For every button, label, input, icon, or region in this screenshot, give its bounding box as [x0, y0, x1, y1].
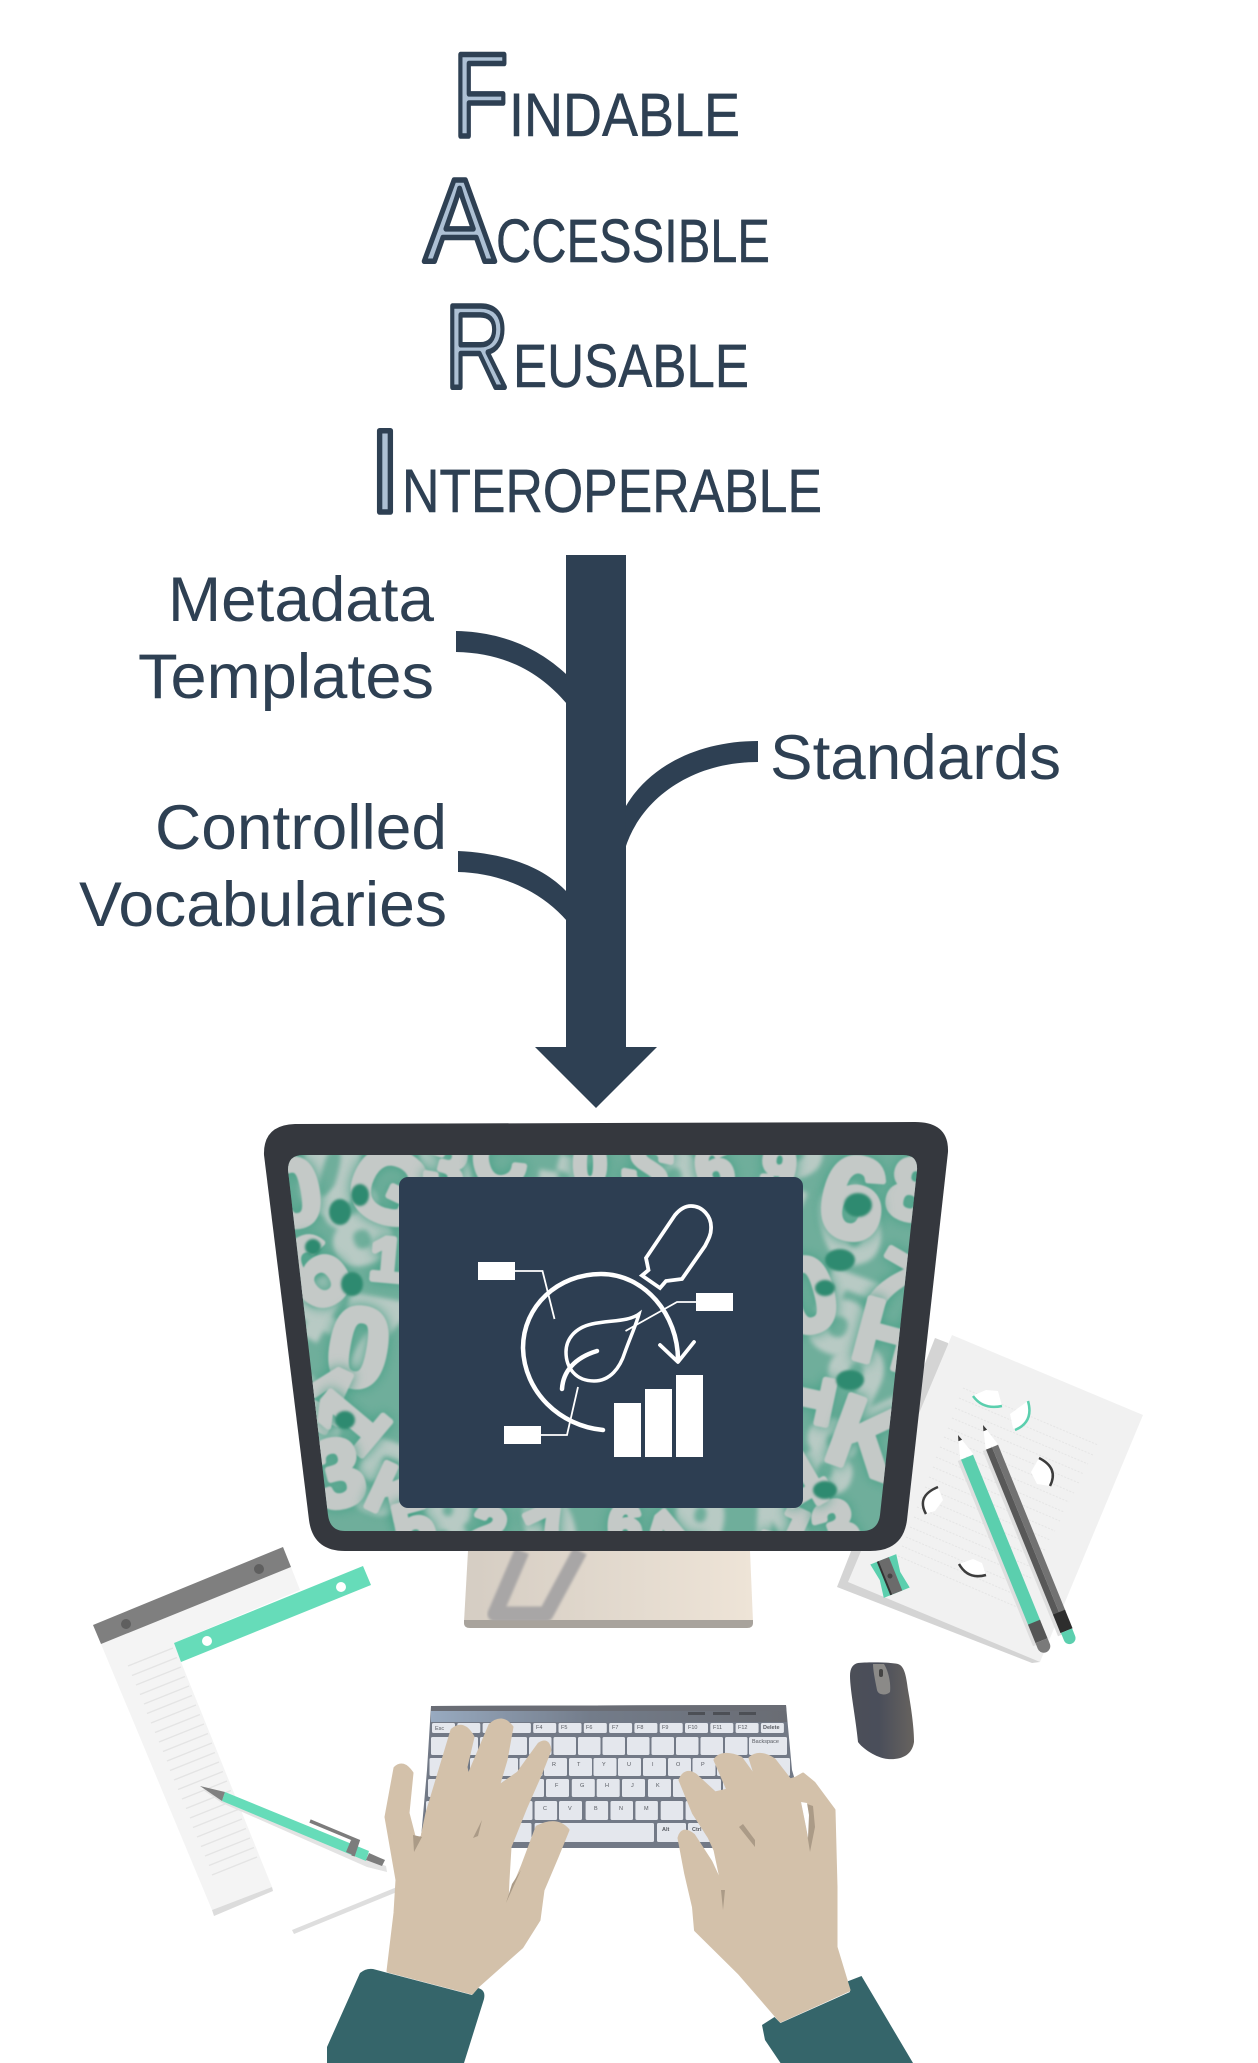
key labels: F8 [637, 1725, 643, 1731]
screen wallpaper of scattered characters: 6 [608, 1493, 642, 1560]
screen wallpaper of scattered characters: 8 [877, 1138, 948, 1242]
heading: Findable: INDABLE [509, 81, 740, 149]
label: Metadata Templates: Metadata [168, 565, 435, 635]
screen wallpaper of scattered characters: 0 [763, 1232, 850, 1360]
key labels: O [676, 1762, 681, 1768]
key labels: B [594, 1806, 598, 1812]
screen wallpaper of scattered characters: 8 [787, 1396, 870, 1518]
key labels: V [568, 1806, 572, 1812]
screen wallpaper of scattered characters: 0 [318, 1282, 399, 1414]
screen wallpaper of scattered characters: S [613, 1123, 683, 1212]
ruler [174, 1566, 371, 1662]
key labels: F12 [738, 1725, 747, 1731]
screen wallpaper of scattered characters: 1 [367, 1225, 406, 1294]
monitor [264, 1122, 948, 1551]
heading: Reusable [445, 281, 749, 413]
key labels: H [605, 1783, 609, 1789]
screen wallpaper of scattered characters: 0 [573, 1131, 607, 1198]
key labels: K [656, 1783, 660, 1789]
label: Metadata Templates: Templates [138, 642, 434, 712]
screen wallpaper of scattered characters: 8 [412, 1472, 479, 1579]
pen on desk [200, 1786, 387, 1872]
screen wallpaper of scattered characters: 1 [293, 1365, 408, 1474]
label: Metadata Templates [138, 565, 435, 712]
green pencil [949, 1432, 1053, 1656]
key labels: I [652, 1762, 654, 1768]
screen wallpaper of scattered characters: 3 [297, 1416, 376, 1532]
icon: bar chart [614, 1375, 703, 1457]
left sleeve [327, 1969, 484, 2063]
dark pencil [974, 1423, 1078, 1647]
screen wallpaper of scattered characters: 4 [279, 1342, 366, 1454]
label: Controlled Vocabularies: Controlled [155, 793, 447, 863]
icon: circular arrow [523, 1274, 678, 1430]
key labels: F6 [586, 1725, 592, 1731]
icon: data lifecycle with leaf, dropper and bars [478, 1206, 733, 1457]
heading: Accessible [424, 155, 770, 287]
screen wallpaper of scattered characters: 0 [259, 1137, 330, 1250]
screen wallpaper of scattered characters: 5 [385, 1484, 443, 1570]
screen wallpaper of scattered characters: 1 [741, 1361, 856, 1435]
screen wallpaper of scattered characters: 3 [250, 1347, 358, 1485]
key labels: Esc [435, 1726, 444, 1732]
screen wallpaper of scattered characters: 2 [810, 1317, 918, 1455]
screen wallpaper of scattered characters: 6 [261, 1210, 370, 1334]
icon: leaf [562, 1314, 639, 1389]
key labels: F5 [561, 1725, 567, 1731]
screen wallpaper of scattered characters: 5 [793, 1247, 893, 1383]
screen wallpaper of scattered characters: 6 [687, 1128, 741, 1208]
heading: Reusable: R [445, 281, 509, 413]
screen wallpaper of scattered characters: J [751, 1487, 819, 1574]
icon: dropper [642, 1206, 711, 1288]
screen wallpaper of scattered characters: 6 [809, 1130, 898, 1268]
screen wallpaper of scattered characters: 0 [805, 1156, 896, 1291]
key labels: Y [602, 1762, 606, 1768]
key labels: T [577, 1762, 581, 1768]
key labels: J [631, 1783, 634, 1789]
keys [426, 1723, 795, 1842]
screen wallpaper of scattered characters: 1 [635, 1491, 715, 1576]
key labels: Alt [662, 1827, 670, 1833]
key labels: Ctrl [692, 1827, 702, 1833]
key labels: F [555, 1783, 559, 1789]
screen wallpaper of scattered characters: 5 [336, 1416, 427, 1540]
label: Standards: Standards [770, 723, 1061, 793]
screen wallpaper of scattered characters: 8 [307, 1157, 407, 1293]
key labels: F10 [688, 1725, 697, 1731]
screen wallpaper of scattered characters: 7 [331, 1272, 412, 1404]
screen wallpaper of scattered characters: 7 [852, 1232, 935, 1331]
label: Controlled Vocabularies: Vocabularies [79, 870, 447, 940]
screen wallpaper of scattered characters: 5 [635, 1111, 709, 1221]
left hand [386, 1720, 568, 1993]
screen wallpaper of scattered characters: 2 [460, 1492, 514, 1566]
heading: Reusable: EUSABLE [513, 332, 749, 400]
desk line [292, 1887, 397, 1934]
computer mouse [850, 1662, 914, 1759]
key labels [435, 1725, 780, 1833]
screen wallpaper of scattered characters: H [843, 1279, 932, 1393]
screen wallpaper of scattered characters: 7 [516, 1487, 584, 1574]
shavings [923, 1390, 1053, 1576]
screen wallpaper of scattered characters: 9 [661, 1471, 735, 1581]
screen wallpaper of scattered characters: 3 [531, 1111, 605, 1221]
title: FAIR acronym [369, 30, 822, 538]
key labels: F7 [612, 1725, 618, 1731]
screen wallpaper of scattered characters: 4 [265, 1238, 369, 1363]
heading: Accessible: CCESSIBLE [496, 207, 770, 275]
arrow with branches [456, 555, 758, 1108]
screen wallpaper of scattered characters: 4 [728, 1473, 822, 1585]
label: Controlled Vocabularies [79, 793, 447, 940]
bezel [264, 1122, 948, 1551]
heading: Interoperable: I [369, 406, 401, 538]
key labels: F4 [536, 1725, 542, 1731]
sharpener [870, 1554, 910, 1598]
screen wallpaper of scattered characters: 0 [284, 1106, 375, 1241]
notepad with ruler [93, 1547, 371, 1916]
screen wallpaper of scattered characters: 2 [749, 1112, 836, 1224]
screen wallpaper of scattered characters: K [356, 1447, 435, 1539]
key labels: R [552, 1762, 556, 1768]
screen wallpaper of scattered characters: 4 [763, 1436, 841, 1529]
screen wallpaper of scattered characters [288, 1155, 918, 1531]
right sleeve [762, 1976, 913, 2063]
key labels: Delete [763, 1725, 780, 1731]
monitor stand [464, 1551, 753, 1628]
screen wallpaper of scattered characters: 0 [509, 1471, 590, 1582]
key labels: G [580, 1783, 584, 1789]
screen wallpaper of scattered characters: 6 [411, 1112, 478, 1219]
screen wallpaper of scattered characters: K [814, 1373, 920, 1503]
paper stack with pencils [837, 1335, 1143, 1663]
key labels: P [701, 1762, 705, 1768]
right hand [679, 1754, 849, 2021]
screen wallpaper of scattered characters: 3 [802, 1481, 870, 1574]
heading: Findable: F [453, 30, 508, 162]
key labels: F9 [662, 1725, 668, 1731]
keyboard [421, 1705, 812, 1848]
data panel on screen [399, 1177, 803, 1508]
screen wallpaper of scattered characters: 3 [417, 1124, 475, 1210]
key labels: C [543, 1806, 547, 1812]
screen wallpaper of scattered characters: 9 [756, 1132, 801, 1204]
heading: Accessible: A [424, 155, 495, 287]
screen wallpaper of scattered characters: G [330, 1120, 448, 1254]
heading: Interoperable: NTEROPERABLE [402, 457, 822, 525]
key labels: Backspace [752, 1739, 779, 1745]
key labels: N [619, 1806, 623, 1812]
heading: Findable [453, 30, 740, 162]
heading: Interoperable [369, 406, 822, 538]
key labels: U [627, 1762, 631, 1768]
key labels: M [644, 1806, 649, 1812]
screen wallpaper of scattered characters: C [464, 1118, 533, 1206]
icon: callout tags [478, 1262, 733, 1444]
key labels: F11 [713, 1725, 722, 1731]
